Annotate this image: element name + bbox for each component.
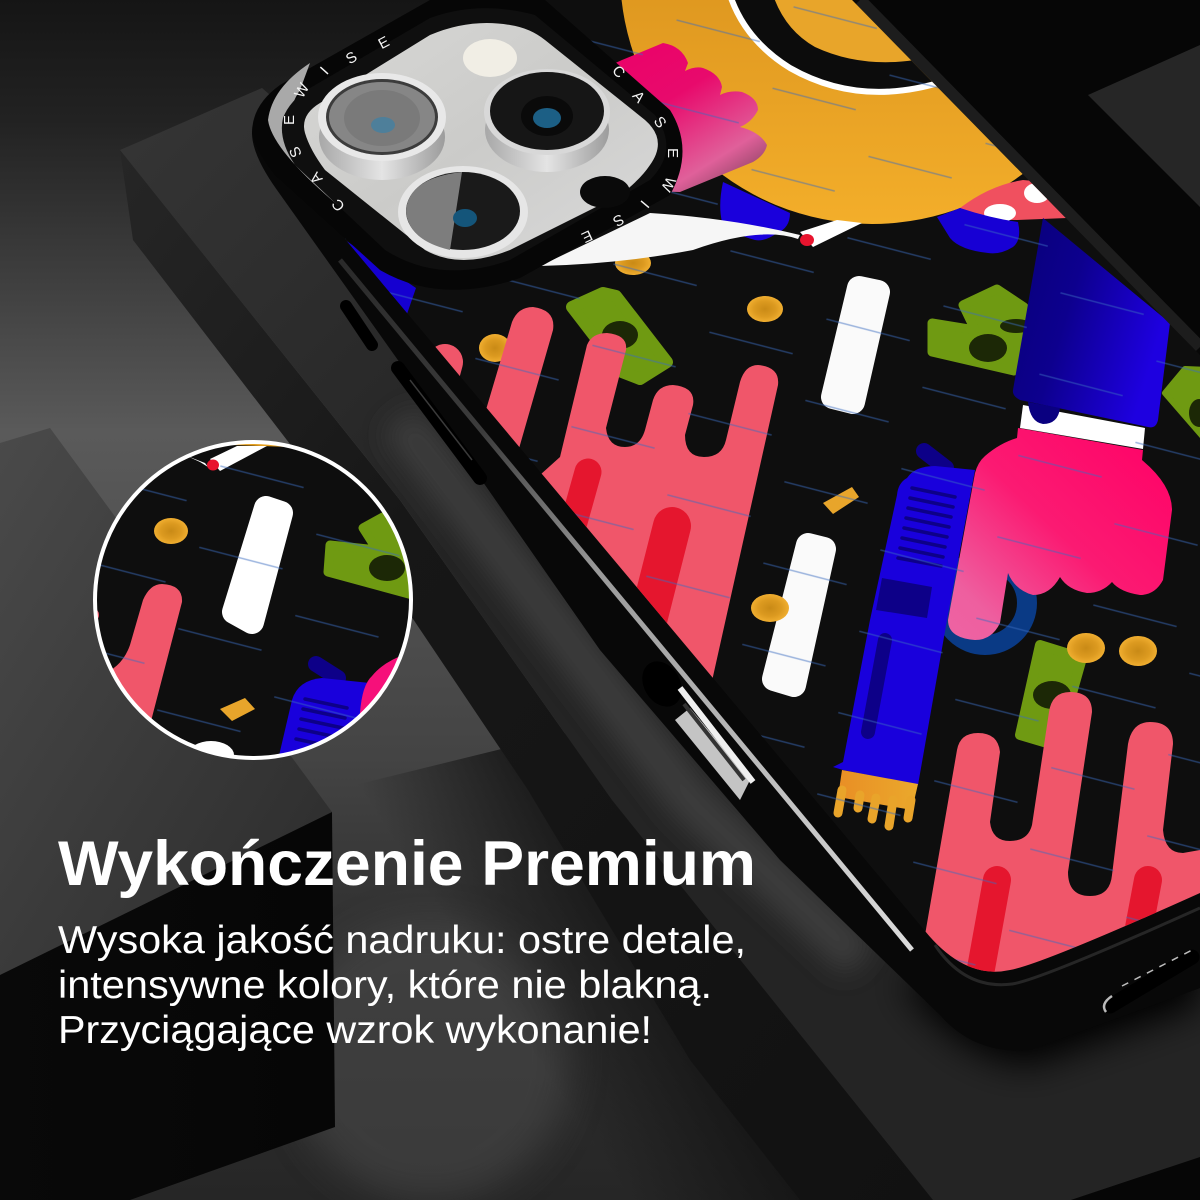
left edge highlight bbox=[340, 260, 912, 950]
brand lettering: E bbox=[579, 226, 595, 246]
blue sleeve bbox=[1013, 218, 1170, 427]
brand lettering: E bbox=[281, 115, 298, 125]
green money left bbox=[572, 293, 667, 379]
left lens bbox=[318, 73, 446, 180]
green money bottom right bbox=[1020, 645, 1082, 746]
lit floor glow below text bbox=[312, 928, 568, 1200]
silver side button bbox=[675, 686, 756, 800]
brand lettering: S bbox=[650, 113, 670, 131]
bottom lens bbox=[398, 166, 528, 258]
phone artwork bbox=[345, 0, 1200, 972]
inset pink fist bbox=[355, 652, 412, 760]
camera bumper bbox=[252, 0, 682, 290]
white cuff bbox=[1020, 405, 1145, 449]
case body bbox=[252, 134, 1200, 1002]
side slots bbox=[346, 306, 480, 478]
gold fringe bbox=[838, 770, 918, 826]
brand lettering: C bbox=[608, 62, 628, 82]
coral finger one bbox=[486, 307, 554, 448]
gray crescent bbox=[268, 63, 340, 207]
coin on white bar bbox=[751, 594, 789, 622]
gold sun bbox=[622, 0, 1022, 224]
description text bbox=[58, 919, 746, 1052]
brand lettering bbox=[281, 33, 681, 246]
phone case bbox=[252, 0, 1200, 1051]
green money far right bbox=[1165, 369, 1200, 445]
coral hand red stripes bbox=[562, 472, 672, 660]
brand lettering: A bbox=[307, 169, 326, 187]
cigarette bbox=[540, 213, 862, 266]
gold confetti bbox=[823, 487, 859, 514]
screen bbox=[1022, 174, 1196, 351]
description text: intensywne kolory, które nie blakną. bbox=[58, 964, 712, 1007]
phone shadow bbox=[904, 982, 1200, 1074]
inset blue pistol bbox=[278, 664, 370, 760]
inset confetti bbox=[220, 698, 255, 721]
brand lettering: E bbox=[664, 148, 681, 158]
lower coral hand bbox=[925, 692, 1200, 1000]
dark top right area bbox=[868, 0, 1200, 338]
brand lettering: A bbox=[629, 88, 648, 106]
trigger ring bbox=[943, 561, 1027, 645]
pistol knob bbox=[924, 451, 946, 468]
right lens bbox=[484, 69, 610, 172]
inset pink sliver bbox=[85, 608, 99, 622]
coral finger small bbox=[435, 344, 463, 376]
sun ring bbox=[728, 0, 937, 95]
brand lettering: I bbox=[637, 197, 652, 211]
bottom port bbox=[1104, 948, 1196, 1012]
lower left block: top face bbox=[0, 428, 332, 975]
mushroom shape bbox=[960, 180, 1067, 222]
coin under cigarette bbox=[615, 257, 651, 275]
brand lettering: C bbox=[328, 195, 349, 215]
brand lettering: S bbox=[286, 144, 306, 160]
brand lettering: E bbox=[375, 33, 392, 53]
inset ring bbox=[95, 442, 411, 758]
background block: top right bbox=[1088, 45, 1200, 207]
brand lettering: S bbox=[343, 48, 360, 68]
pistol vents bbox=[898, 488, 955, 566]
blue blob right bbox=[937, 208, 1019, 253]
floor darkening toward platform bbox=[391, 734, 800, 1200]
coins right bbox=[1020, 633, 1157, 746]
inset gold sliver bbox=[233, 440, 295, 447]
lettered ring bbox=[282, 8, 666, 270]
coins bbox=[479, 296, 783, 362]
description text: Przyciągające wzrok wykonanie! bbox=[58, 1009, 652, 1052]
pink hand near camera bbox=[600, 43, 767, 192]
blue cuff near camera bbox=[720, 182, 790, 240]
background bbox=[0, 0, 791, 1200]
brand lettering: W bbox=[657, 174, 679, 195]
bottom gloss bbox=[935, 908, 1200, 985]
brand lettering: S bbox=[610, 210, 627, 230]
coral hand bbox=[540, 333, 778, 690]
inset dash overlay bbox=[90, 440, 420, 760]
heading: Wykończenie Premium bbox=[58, 829, 756, 899]
lower hand red stripes bbox=[978, 880, 1148, 985]
flash bbox=[463, 39, 517, 77]
sun inner disc bbox=[773, 0, 915, 62]
sensor bbox=[580, 176, 630, 208]
zoom inset bbox=[85, 440, 420, 769]
black corner bottom right bbox=[1071, 1157, 1200, 1200]
inset white bar bottom bbox=[188, 741, 234, 769]
brand lettering: W bbox=[291, 80, 313, 101]
description text: Wysoka jakość nadruku: ostre detale, bbox=[58, 919, 746, 962]
pistol panel bbox=[876, 578, 932, 618]
camera module bbox=[252, 0, 682, 290]
inset coral hand bbox=[100, 584, 182, 725]
pistol slot bbox=[868, 640, 885, 732]
lower left block: front face bbox=[0, 812, 335, 1200]
blue pistol bbox=[833, 451, 975, 826]
inset white bar bbox=[234, 508, 281, 622]
brand lettering: I bbox=[317, 64, 332, 78]
platform block: side face bbox=[125, 181, 565, 822]
inset cigarette bbox=[187, 446, 267, 471]
light band on platform top bbox=[400, 420, 860, 960]
inset background bbox=[96, 443, 410, 757]
inset coin bbox=[154, 518, 188, 544]
pistol body bbox=[833, 466, 975, 785]
right bezel bbox=[860, 0, 1200, 347]
green money right bbox=[932, 289, 1032, 371]
pink fist bbox=[948, 428, 1172, 640]
blue peek behind camera bbox=[345, 240, 416, 314]
camera glass bbox=[304, 23, 658, 260]
inset green money bbox=[328, 517, 420, 597]
white bars bbox=[774, 288, 878, 685]
